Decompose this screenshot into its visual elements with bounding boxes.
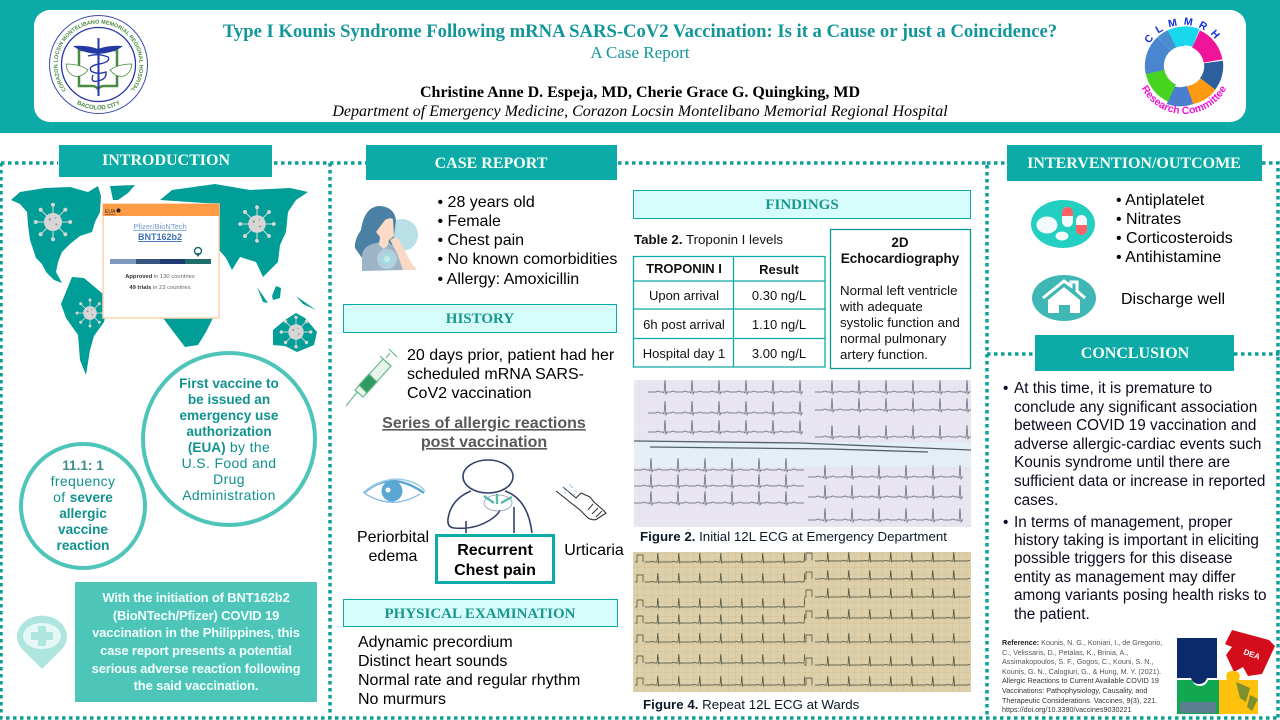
conclusion text: the patient. bbox=[1014, 606, 1090, 623]
conclusion text: among variants posing health risks to bbox=[1014, 587, 1267, 604]
callout: allergic reaction frequency: allergic bbox=[59, 506, 107, 521]
heading: introduction: INTRODUCTION bbox=[102, 152, 230, 169]
conclusion text: history taking is important in eliciting bbox=[1014, 532, 1259, 549]
callout: allergic reaction frequency: vaccine bbox=[58, 522, 108, 537]
physical examination text: Distinct heart sounds bbox=[358, 653, 507, 670]
physical examination text: Adynamic precordium bbox=[358, 634, 513, 651]
conclusion text: possible triggers for this disease bbox=[1014, 550, 1233, 567]
medication list: • Antiplatelet bbox=[1116, 192, 1205, 209]
conclusion text: cases. bbox=[1014, 492, 1058, 509]
periorbital edema label: edema bbox=[369, 548, 418, 565]
troponin table: 3.00 ng/L bbox=[752, 346, 806, 361]
heading: history: HISTORY bbox=[446, 311, 514, 327]
physical examination text: No murmurs bbox=[358, 691, 446, 708]
heading: findings: FINDINGS bbox=[765, 197, 839, 213]
callout: first vaccine: First vaccine to bbox=[179, 376, 279, 391]
icon: person with chest pain bbox=[448, 460, 532, 533]
troponin table: Hospital day 1 bbox=[643, 346, 725, 361]
callout: allergic reaction frequency: 11.1: 1 bbox=[62, 458, 104, 473]
callout: recurrent chest pain: Recurrent bbox=[457, 542, 533, 559]
icon: hand with rash bbox=[556, 484, 606, 520]
subheading: allergic reactions: Series of allergic reactions bbox=[382, 415, 586, 432]
conclusion text: conclude any significant association bbox=[1014, 399, 1257, 416]
periorbital edema label: Periorbital bbox=[357, 529, 429, 546]
conclusion text: • bbox=[1003, 380, 1008, 397]
puzzle logo: DEA bbox=[1242, 647, 1261, 662]
figure: repeat ECG bbox=[633, 545, 971, 692]
callout: first vaccine: Drug bbox=[213, 471, 245, 487]
patient profile list: • 28 years old bbox=[438, 194, 535, 211]
history text: scheduled mRNA SARS- bbox=[407, 366, 584, 383]
callout: allergic reaction frequency: of severe bbox=[53, 489, 113, 505]
callout: recurrent chest pain: Chest pain bbox=[454, 562, 536, 579]
conclusion text bbox=[1003, 380, 1267, 623]
vaccine card: EUA bbox=[105, 209, 116, 215]
troponin table: Upon arrival bbox=[649, 288, 719, 303]
callout: first vaccine bbox=[143, 353, 315, 525]
text block: case summary: the said vaccination. bbox=[134, 678, 258, 693]
reference: https://doi.org/10.3390/vaccines9030221 bbox=[1002, 705, 1131, 714]
panel: introduction bbox=[11, 145, 317, 702]
echocardiography box: systolic function and bbox=[840, 315, 960, 330]
research committee logo bbox=[1142, 17, 1226, 114]
conclusion text: • bbox=[1003, 514, 1008, 531]
troponin table: Result bbox=[759, 262, 800, 277]
periorbital edema label bbox=[357, 529, 429, 565]
callout: first vaccine: authorization bbox=[186, 424, 272, 439]
heading: introduction bbox=[59, 145, 272, 177]
echocardiography box: Echocardiography bbox=[841, 251, 960, 266]
reference: Therapeutic Considerations. Vaccines, 9(3), 221. bbox=[1002, 696, 1157, 705]
hospital seal logo: CORAZON LOCSIN MONTELIBANO MEMORIAL REGIONAL HOSPITAL bbox=[54, 20, 144, 92]
heading: physical examination bbox=[344, 600, 618, 626]
conclusion text: At this time, it is premature to bbox=[1014, 380, 1212, 397]
text block: case summary bbox=[75, 582, 317, 702]
icon: house bbox=[1032, 275, 1096, 321]
patient profile list: • Chest pain bbox=[438, 232, 524, 249]
panel: intervention and outcome bbox=[1002, 145, 1275, 714]
title block: Christine Anne D. Espeja, MD, Cherie Grace G. Quingking, MD bbox=[420, 84, 860, 101]
text block: case summary: serious adverse reaction following bbox=[92, 661, 301, 676]
echocardiography box bbox=[830, 230, 970, 368]
callout: first vaccine: Administration bbox=[182, 487, 276, 503]
caption: figure 2: Figure 2. Initial 12L ECG at Emergency Department bbox=[640, 529, 947, 544]
conclusion text: entity as management may differ bbox=[1014, 569, 1236, 586]
callout: recurrent chest pain bbox=[436, 536, 554, 582]
reference: Allergic Reactions to Current Available COVID 19 bbox=[1002, 676, 1159, 685]
caption: figure 4: Figure 4. Repeat 12L ECG at Wards bbox=[643, 697, 860, 712]
heading: physical examination: PHYSICAL EXAMINATION bbox=[384, 606, 576, 622]
medication list bbox=[1116, 192, 1233, 266]
physical examination text bbox=[358, 634, 580, 708]
title block: A Case Report bbox=[590, 43, 690, 62]
heading: case report: CASE REPORT bbox=[435, 155, 548, 172]
callout: first vaccine: emergency use bbox=[180, 408, 279, 423]
figure: initial ECG bbox=[634, 372, 971, 527]
history text bbox=[407, 347, 615, 402]
callout: first vaccine: be issued an bbox=[188, 392, 270, 407]
troponin table: TROPONIN I bbox=[646, 261, 722, 276]
callout: first vaccine: (EUA) by the bbox=[188, 439, 270, 455]
icon: woman with chest pain bbox=[355, 206, 418, 271]
medication list: • Antihistamine bbox=[1116, 249, 1221, 266]
discharge label: Discharge well bbox=[1121, 291, 1225, 308]
echocardiography box: 2D bbox=[891, 235, 909, 250]
vaccine card bbox=[103, 204, 219, 318]
history text: 20 days prior, patient had her bbox=[407, 347, 615, 364]
patient profile list bbox=[438, 194, 617, 288]
vaccine card: Pfizer/BioNTech bbox=[133, 222, 187, 231]
troponin table: 1.10 ng/L bbox=[752, 317, 806, 332]
hospital seal logo: BACOLOD CITY bbox=[77, 100, 119, 110]
hospital seal logo bbox=[49, 15, 148, 114]
callout: allergic reaction frequency: reaction bbox=[57, 538, 109, 553]
icon: medication bbox=[1031, 200, 1095, 248]
icon: syringe bbox=[346, 349, 397, 406]
heading: findings bbox=[634, 190, 970, 218]
heading: case report bbox=[366, 145, 617, 180]
icon: eye bbox=[364, 479, 425, 502]
text block: case summary: (BioNTech/Pfizer) COVID 19 bbox=[113, 608, 279, 623]
reference: Vaccinations: Pathophysiology, Causality, and bbox=[1002, 686, 1147, 695]
text block: case summary: vaccination in the Philippines, this bbox=[92, 625, 300, 640]
reference: Assimakopoulos, S. F., Gogos, C., Kouni, S. N., bbox=[1002, 657, 1153, 666]
title block bbox=[223, 21, 1057, 120]
vaccine card: Approved in 130 countries bbox=[125, 274, 195, 280]
table caption: Table 2. Troponin I levels bbox=[634, 232, 783, 247]
heading: conclusion bbox=[1035, 335, 1234, 371]
history text: CoV2 vaccination bbox=[407, 385, 532, 402]
panel outlines bbox=[1, 163, 1280, 718]
subheading: allergic reactions: post vaccination bbox=[421, 434, 547, 451]
heading: intervention/outcome: INTERVENTION/OUTCOME bbox=[1027, 155, 1241, 172]
text block: case summary: With the initiation of BNT162b2 bbox=[102, 590, 290, 605]
callout: allergic reaction frequency: frequency bbox=[51, 473, 115, 489]
virus icons bbox=[34, 203, 312, 348]
panel: case report bbox=[344, 145, 971, 712]
title block: Type I Kounis Syndrome Following mRNA SARS-CoV2 Vaccination: Is it a Cause or just a Coincidence? bbox=[223, 21, 1057, 42]
research committee logo: Research Committee bbox=[1142, 85, 1226, 114]
reference: Reference: Kounis, N. G., Koniari, I., de Gregorio, bbox=[1002, 638, 1162, 647]
physical examination text: Normal rate and regular rhythm bbox=[358, 672, 580, 689]
heading: intervention/outcome bbox=[1007, 145, 1262, 181]
patient profile list: • Allergy: Amoxicillin bbox=[438, 271, 579, 288]
callout: allergic reaction frequency bbox=[21, 444, 145, 568]
troponin table: 0.30 ng/L bbox=[752, 288, 806, 303]
troponin table bbox=[634, 256, 825, 367]
header band bbox=[0, 0, 1280, 133]
reference: C., Velissaris, D., Petalas, K., Brinia, A., bbox=[1002, 648, 1128, 657]
reference bbox=[1002, 638, 1162, 714]
echocardiography box: with adequate bbox=[839, 299, 923, 314]
conclusion text: adverse allergic-cardiac events such bbox=[1014, 436, 1261, 453]
research committee logo: CLMMRH bbox=[1145, 17, 1220, 42]
echocardiography box: normal pulmonary bbox=[840, 331, 947, 346]
conclusion text: sufficient data or increase in reported bbox=[1014, 473, 1265, 490]
heading: conclusion: CONCLUSION bbox=[1081, 345, 1190, 362]
reference: Kounis, G. N., Calogiuri, G., & Hung, M. Y. (2021). bbox=[1002, 667, 1161, 676]
urticaria label: Urticaria bbox=[564, 542, 624, 559]
text block: case summary: case report presents a potential bbox=[100, 643, 292, 658]
world map bbox=[11, 184, 317, 375]
echocardiography box: artery function. bbox=[840, 347, 928, 362]
medication list: • Corticosteroids bbox=[1116, 230, 1233, 247]
callout: first vaccine: U.S. Food and bbox=[182, 455, 276, 471]
icon: medical pin bbox=[17, 616, 67, 669]
puzzle logo bbox=[1177, 630, 1275, 714]
vaccine card: BNT162b2 bbox=[138, 232, 182, 242]
conclusion text: between COVID 19 vaccination and bbox=[1014, 417, 1256, 434]
patient profile list: • Female bbox=[438, 213, 501, 230]
heading: history bbox=[344, 304, 616, 332]
troponin table: 6h post arrival bbox=[643, 317, 725, 332]
conclusion text: In terms of management, proper bbox=[1014, 514, 1233, 531]
title block: Department of Emergency Medicine, Corazon Locsin Montelibano Memorial Regional Hospital bbox=[331, 103, 948, 120]
patient profile list: • No known comorbidities bbox=[438, 251, 617, 268]
conclusion text: Kounis syndrome until there are bbox=[1014, 454, 1230, 471]
vaccine card: 49 trials in 23 countries bbox=[129, 285, 191, 291]
medication list: • Nitrates bbox=[1116, 211, 1181, 228]
subheading: allergic reactions bbox=[382, 415, 586, 451]
echocardiography box: Normal left ventricle bbox=[840, 283, 958, 298]
